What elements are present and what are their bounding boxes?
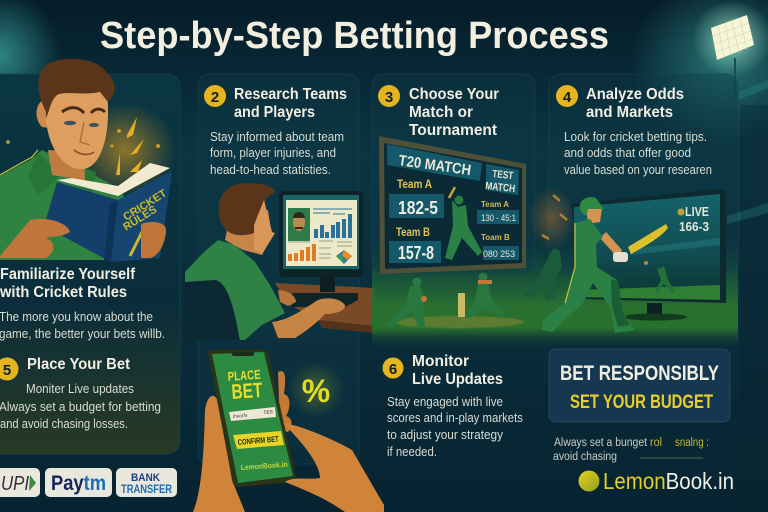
icon: glowing percent — [288, 362, 344, 418]
step 5 text: Moniter Live updates — [26, 382, 134, 396]
scoreboard: Team A — [397, 179, 432, 191]
bet amount input: 5E8 — [264, 409, 273, 416]
step 5 heading: Place Your Bet — [27, 356, 131, 373]
icon: number 2 — [204, 85, 226, 107]
dashboard: blue bars — [314, 214, 352, 238]
dashboard: orange bars — [288, 244, 316, 261]
icon: number 3 — [378, 85, 400, 107]
step 3 heading: Choose Your — [409, 86, 499, 103]
step 1 heading: Familiarize Yourself — [0, 266, 136, 283]
step 1 heading — [0, 266, 136, 301]
scoreboard: 157-8 — [398, 243, 434, 263]
logo: Bank Transfer: TRANSFER — [121, 484, 173, 496]
payment logos — [0, 468, 177, 497]
scoreboard: Toam B — [481, 233, 510, 242]
scoreboard: TEST — [492, 168, 514, 182]
step 6 text — [387, 395, 523, 459]
budget note: rol — [650, 437, 662, 449]
batsman on scoreboard — [445, 187, 482, 260]
icon: glowing percent: % — [302, 373, 330, 409]
logo: Paytm — [45, 468, 112, 497]
illustration: man at computer — [185, 183, 345, 340]
icon: number 4: 4 — [563, 89, 572, 106]
logo: UPI: UPI — [1, 473, 29, 495]
phone text: PLACE — [227, 367, 261, 384]
callout: bet responsibly: SET YOUR BUDGET — [570, 392, 713, 413]
step 6 heading: Live Updates — [412, 371, 503, 388]
step 5 text — [0, 382, 161, 431]
scoreboard: Team A — [481, 200, 509, 209]
logo: Paytm: Paytm — [51, 472, 106, 495]
step 4 heading: Analyze Odds — [586, 86, 684, 103]
confirm bet button: CONFIRM BET — [237, 434, 279, 447]
callout: bet responsibly — [549, 349, 730, 422]
callout: bet responsibly: BET RESPONSIBLY — [560, 362, 719, 385]
panel: step 3 choose match — [372, 74, 535, 274]
step 2 heading: and Players — [234, 104, 315, 121]
step 4 text: and odds that offer good — [564, 146, 691, 160]
illustration: right hand tapping phone — [283, 423, 384, 512]
live score on tv: 166-3 — [679, 220, 709, 234]
logo: Bank Transfer: BANK — [131, 472, 160, 484]
step 3 heading — [409, 86, 499, 139]
step 2 text: form, player injuries, and — [210, 146, 336, 160]
batsman — [542, 197, 668, 333]
step 6 text: if needed. — [387, 445, 437, 459]
logo: Bank Transfer — [116, 468, 177, 497]
logo: LemonBook.in: LemonBook.in — [603, 468, 734, 494]
scoreboard: 182-5 — [398, 198, 438, 218]
illustration: cricketers on the pitch — [385, 272, 524, 328]
step 1 text: game, the better your bets willb. — [0, 327, 165, 341]
book cover title: RULES — [121, 204, 159, 234]
budget note — [553, 437, 709, 463]
phone text: BET — [231, 379, 263, 404]
step 2 text: head-to-head statisties. — [210, 163, 331, 177]
live score on tv: LIVE — [685, 205, 709, 219]
scoreboard: 080 253 — [483, 249, 515, 259]
step 1 text: The more you know about the — [0, 310, 153, 324]
panel: step 1 familiarize — [0, 59, 180, 454]
live score on tv — [678, 205, 709, 234]
step 3 heading: Match or — [409, 104, 473, 121]
icon: number 6 — [382, 358, 404, 378]
bet amount input — [229, 407, 276, 421]
icon: number 4 — [556, 85, 578, 107]
illustration: phone place bet — [208, 349, 296, 487]
step 2 text — [210, 130, 344, 177]
illustration: desk with monitor — [275, 191, 375, 333]
step 6 text: Stay engaged with live — [387, 395, 503, 409]
step 3 heading: Tournament — [409, 122, 498, 139]
step 6 text: to adjust your strategy — [387, 428, 504, 442]
step 4 heading — [586, 86, 684, 121]
bet amount input: ihsorfs — [233, 413, 248, 420]
scoreboard: 130 - 45:1 — [481, 213, 516, 223]
panel: step 6 monitor — [382, 353, 523, 459]
scoreboard: Team B — [396, 227, 430, 239]
step 1 text — [0, 310, 165, 341]
icon: number 6: 6 — [389, 361, 397, 378]
step 1 heading: with Cricket Rules — [0, 284, 127, 301]
illustration: hands holding phone — [193, 371, 292, 512]
step 6 text: scores and in-play markets — [387, 411, 523, 425]
budget note: Always set a bunget — [554, 437, 648, 449]
budget note: avoid chasing — [553, 451, 617, 463]
scoreboard — [379, 136, 526, 274]
step 2 text: Stay informed about team — [210, 130, 344, 144]
step 5 text: and avoid chasing losses. — [0, 417, 128, 431]
scoreboard: T20 MATCH — [397, 152, 472, 179]
illustration: man reading cricket rules book — [0, 59, 177, 262]
step 4 heading: and Markets — [586, 104, 673, 121]
illustration: live match tv with batsman — [524, 186, 726, 333]
phone brand: LemonBook.in — [241, 460, 288, 472]
icon: number 3: 3 — [385, 89, 393, 106]
budget note: snalng : — [675, 437, 709, 449]
step 2 heading: Research Teams — [234, 86, 347, 103]
step 4 text: Look for cricket betting tips. — [564, 130, 707, 144]
step 6 heading — [412, 353, 503, 388]
step 2 heading — [234, 86, 347, 121]
ground: cricket pitch — [372, 240, 738, 350]
dashboard: pie chart — [336, 250, 352, 264]
book cover title: CRICKET — [121, 187, 169, 224]
icon: stadium floodlight — [692, 0, 768, 98]
panel: step 2 research — [185, 74, 375, 464]
step 5 text: Always set a budget for betting — [0, 400, 161, 414]
background fielder — [524, 249, 562, 300]
panel: step 4 analyze odds — [549, 74, 738, 274]
icon: number 5: 5 — [3, 362, 11, 379]
icon: number 2: 2 — [211, 89, 219, 106]
step 4 text — [564, 130, 712, 177]
step 4 text: value based on your researen — [564, 163, 712, 177]
icon: number 5 — [0, 358, 18, 380]
dashboard: portrait — [288, 208, 310, 241]
step 6 heading: Monitor — [412, 353, 469, 370]
logo: UPI — [0, 468, 40, 497]
title: Step-by-Step Betting Process — [100, 15, 609, 57]
scoreboard: MATCH — [485, 180, 516, 195]
phone text — [227, 367, 263, 404]
